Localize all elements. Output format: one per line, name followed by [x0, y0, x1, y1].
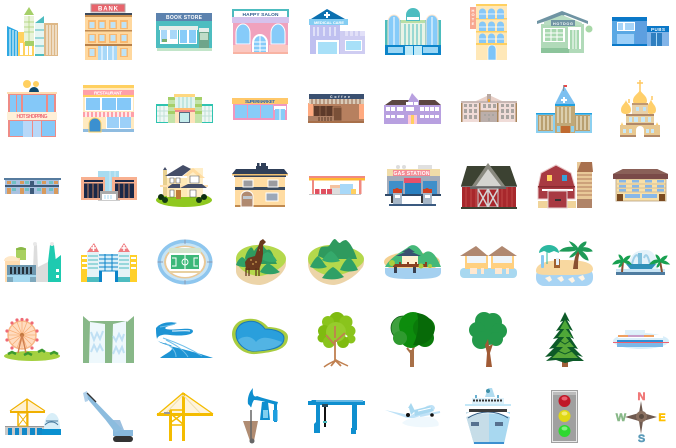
icon: blue pub building: [612, 17, 669, 46]
icon: compass rose: S: [638, 433, 645, 445]
icon: medical care: [309, 9, 365, 54]
icon: red barn and silo: [538, 162, 593, 208]
icon: blue pub building: PUBS: [651, 27, 665, 32]
icon: hotel: [470, 4, 507, 60]
icon: stately palace: [461, 94, 517, 122]
icon: water bungalows: [460, 246, 517, 278]
icon: hotel: E: [472, 21, 475, 26]
icon: red barn with dark roof: [461, 163, 517, 209]
icon: small cruise liner: [613, 330, 669, 349]
icon: river: [156, 322, 213, 358]
icon: factory: [4, 242, 61, 282]
icon: pine tree: [545, 312, 584, 367]
icon: cottage with sign: [537, 11, 592, 53]
icon: giraffe island: [236, 239, 286, 285]
icon: maple-like tree: [318, 312, 356, 367]
icon: compass rose: N: [638, 391, 646, 403]
icon: supermarket: SUPERMARKET: [245, 99, 275, 104]
icon: purple school: [384, 93, 441, 124]
icon: shopping mall: [7, 80, 57, 137]
icon: stadium: [158, 240, 212, 284]
icon: gantry T crane: [308, 400, 365, 434]
icon: gas station: [385, 165, 441, 206]
icon: harbour crane and ship: [5, 399, 61, 435]
icon: hotel: O: [471, 12, 475, 17]
icon: deep green tree: [391, 312, 435, 367]
icon: airplane: [385, 403, 440, 427]
icon: beach umbrella and palm: [536, 242, 593, 286]
icon: ferris wheel: [4, 320, 60, 361]
icon: lakeside pavilion: [384, 245, 441, 279]
icon: suburban house: [156, 165, 212, 207]
icon: supermarket: [232, 98, 288, 120]
icon: traffic light: [552, 390, 578, 442]
icon: bank: BANK: [98, 6, 119, 12]
icon: book store: [156, 13, 212, 51]
icon: gas station: GAS STATION: [394, 171, 430, 177]
icon: coffee shop: [308, 94, 364, 123]
icon: compass rose: W: [616, 412, 627, 424]
icon: oil pump: [243, 388, 278, 444]
icon: book store: BOOK STORE: [166, 15, 203, 21]
icon: beauty salon: [232, 9, 289, 54]
icon: bank: [85, 4, 132, 60]
icon: crawler crane: [83, 391, 133, 442]
icon: large glass hotel: [385, 8, 441, 55]
icon: apartment block: [4, 178, 61, 194]
icon: compass rose: [616, 391, 666, 445]
icon: green school building: [156, 94, 213, 123]
icon: medical care: MEDICAL CARE: [314, 20, 344, 25]
icon: hotel: T: [472, 16, 475, 22]
icon: compass rose: E: [658, 412, 666, 424]
icon: restaurant: RESTAURANT: [94, 90, 122, 96]
icon: blue-roofed hall: [536, 85, 592, 133]
icon: coffee shop: Coffee: [330, 95, 350, 99]
icon: glass office block: [81, 171, 137, 201]
icon: restaurant: [83, 85, 134, 132]
icon: castle-like hospital: [81, 243, 137, 282]
icon: palm fountain: [613, 250, 669, 275]
icon: waterfall: [83, 316, 134, 363]
icon: onion-domed church: [620, 80, 660, 137]
icon: shopping mall: HOT SHOPPING: [16, 114, 48, 120]
icon: hotel: H: [472, 8, 475, 13]
icon: lake: [232, 319, 288, 354]
icon: mountain island: [308, 239, 364, 285]
icon: round green tree: [469, 312, 507, 367]
icon: petrol canopy shop: [309, 176, 365, 195]
icon: beauty salon: HAPPY SALON: [242, 12, 279, 18]
icon: long lodge: [613, 169, 668, 201]
icon: cruise ship front: [465, 388, 511, 444]
icon: cottage with sign: HOTDOG: [553, 22, 573, 26]
icon: two-storey home: [232, 163, 288, 207]
icon: city skyscrapers: [7, 7, 58, 56]
icon: port gantry crane: [157, 393, 213, 441]
